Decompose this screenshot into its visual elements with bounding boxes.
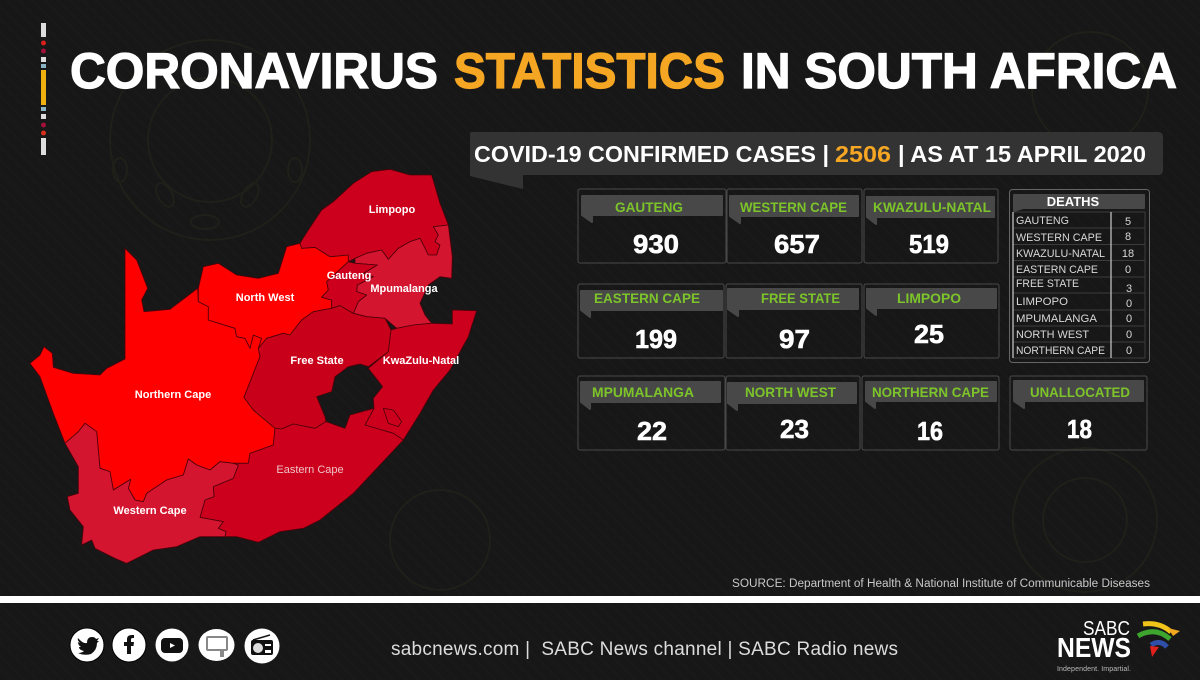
deaths table: 0 <box>1126 345 1132 357</box>
deaths table: WESTERN CAPE <box>1016 232 1102 244</box>
deaths table: 3 <box>1126 283 1132 295</box>
province: Free State <box>244 306 391 429</box>
title: IN SOUTH AFRICA <box>741 43 1177 99</box>
map labels: Limpopo <box>369 204 415 216</box>
deaths table: LIMPOPO <box>1016 296 1068 308</box>
logo: SABC News <box>1057 618 1180 673</box>
card: Northern Cape: NORTHERN CAPE <box>872 384 989 400</box>
deaths table: KWAZULU-NATAL <box>1016 248 1105 260</box>
deaths table: NORTH WEST <box>1016 329 1089 341</box>
title <box>70 43 1177 99</box>
deaths table: 5 <box>1125 216 1131 228</box>
map of South Africa <box>30 169 477 563</box>
map labels: Western Cape <box>113 505 187 517</box>
province: Western Cape <box>65 423 238 563</box>
card: Unallocated <box>1010 376 1147 450</box>
card: Unallocated: UNALLOCATED <box>1030 384 1130 400</box>
province: Limpopo <box>300 169 448 262</box>
deaths table: 8 <box>1125 231 1131 243</box>
card: North West <box>726 376 860 450</box>
province: KwaZulu-Natal <box>365 310 477 440</box>
card: Eastern Cape: EASTERN CAPE <box>594 290 700 306</box>
logo: SABC News: Independent. Impartial. <box>1057 666 1131 673</box>
icon: twitter <box>70 628 104 662</box>
card: Northern Cape <box>862 376 999 450</box>
deaths table <box>1010 190 1150 362</box>
card: Western Cape: WESTERN CAPE <box>740 199 847 215</box>
footer links: sabcnews.com | SABC News channel | SABC Radio news <box>391 639 898 660</box>
card: Free State: FREE STATE <box>761 290 840 306</box>
card: Gauteng: GAUTENG <box>615 199 683 215</box>
card: Free State: 97 <box>779 324 810 354</box>
map labels: KwaZulu-Natal <box>383 355 459 367</box>
card: Limpopo <box>864 284 999 358</box>
deaths table: MPUMALANGA <box>1016 313 1098 325</box>
icon: facebook <box>112 628 146 662</box>
card: Unallocated: 18 <box>1067 414 1092 444</box>
deaths table: 0 <box>1126 298 1132 310</box>
card: Western Cape <box>727 189 862 263</box>
title: STATISTICS <box>454 43 725 99</box>
province: Mpumalanga <box>353 225 452 328</box>
map labels: Mpumalanga <box>370 283 438 295</box>
deaths table: 0 <box>1126 329 1132 341</box>
card: Gauteng: 930 <box>633 229 679 259</box>
card: KwaZulu-Natal <box>864 189 998 263</box>
province: Northern Cape <box>30 248 275 502</box>
province: Eastern Cape <box>200 408 403 542</box>
deaths table: GAUTENG <box>1016 215 1069 227</box>
card: Eastern Cape: 199 <box>635 324 677 354</box>
card: KwaZulu-Natal: KWAZULU-NATAL <box>873 199 991 215</box>
map labels: Free State <box>290 355 344 367</box>
confirmed cases banner: 2506 <box>835 141 891 167</box>
map labels: Gauteng <box>327 270 371 282</box>
logo: SABC News: SABC <box>1083 618 1130 640</box>
card: Limpopo: LIMPOPO <box>897 290 961 306</box>
logo: SABC News: NEWS <box>1057 632 1131 663</box>
card: Eastern Cape <box>578 284 724 358</box>
title: CORONAVIRUS <box>70 43 438 99</box>
card: Limpopo: 25 <box>914 319 944 349</box>
card: Free State <box>726 284 862 358</box>
deaths table: 0 <box>1125 264 1131 276</box>
confirmed cases banner: COVID-19 CONFIRMED CASES | <box>474 141 829 167</box>
card: KwaZulu-Natal: 519 <box>909 229 949 259</box>
province: Gauteng <box>322 262 377 313</box>
map labels: Eastern Cape <box>276 464 344 476</box>
card: North West: 23 <box>780 414 809 444</box>
card: Northern Cape: 16 <box>917 416 943 446</box>
card: Mpumalanga: 22 <box>637 416 667 446</box>
deaths table: FREE STATE <box>1016 278 1079 290</box>
card: North West: NORTH WEST <box>745 384 836 400</box>
icon: beaded decoration <box>41 23 46 155</box>
card: Mpumalanga: MPUMALANGA <box>592 384 694 400</box>
deaths table: DEATHS <box>1047 194 1100 209</box>
source note: SOURCE: Department of Health & National Institute of Communicable Diseases <box>732 578 1150 590</box>
icon: radio <box>244 628 280 664</box>
deaths table: EASTERN CAPE <box>1016 264 1098 276</box>
deaths table: NORTHERN CAPE <box>1016 345 1105 357</box>
icon: youtube <box>156 628 188 662</box>
confirmed cases banner: | AS AT 15 APRIL 2020 <box>898 141 1146 167</box>
confirmed cases banner <box>470 132 1163 189</box>
deaths table: 0 <box>1126 313 1132 325</box>
map labels: North West <box>236 292 295 304</box>
icon: television <box>198 629 234 661</box>
map labels: Northern Cape <box>135 389 211 401</box>
card: Gauteng <box>578 189 726 263</box>
card: Mpumalanga <box>578 376 725 450</box>
deaths table: 18 <box>1122 248 1134 260</box>
card: Western Cape: 657 <box>774 229 820 259</box>
province: North West <box>198 243 348 348</box>
map labels <box>113 204 459 517</box>
